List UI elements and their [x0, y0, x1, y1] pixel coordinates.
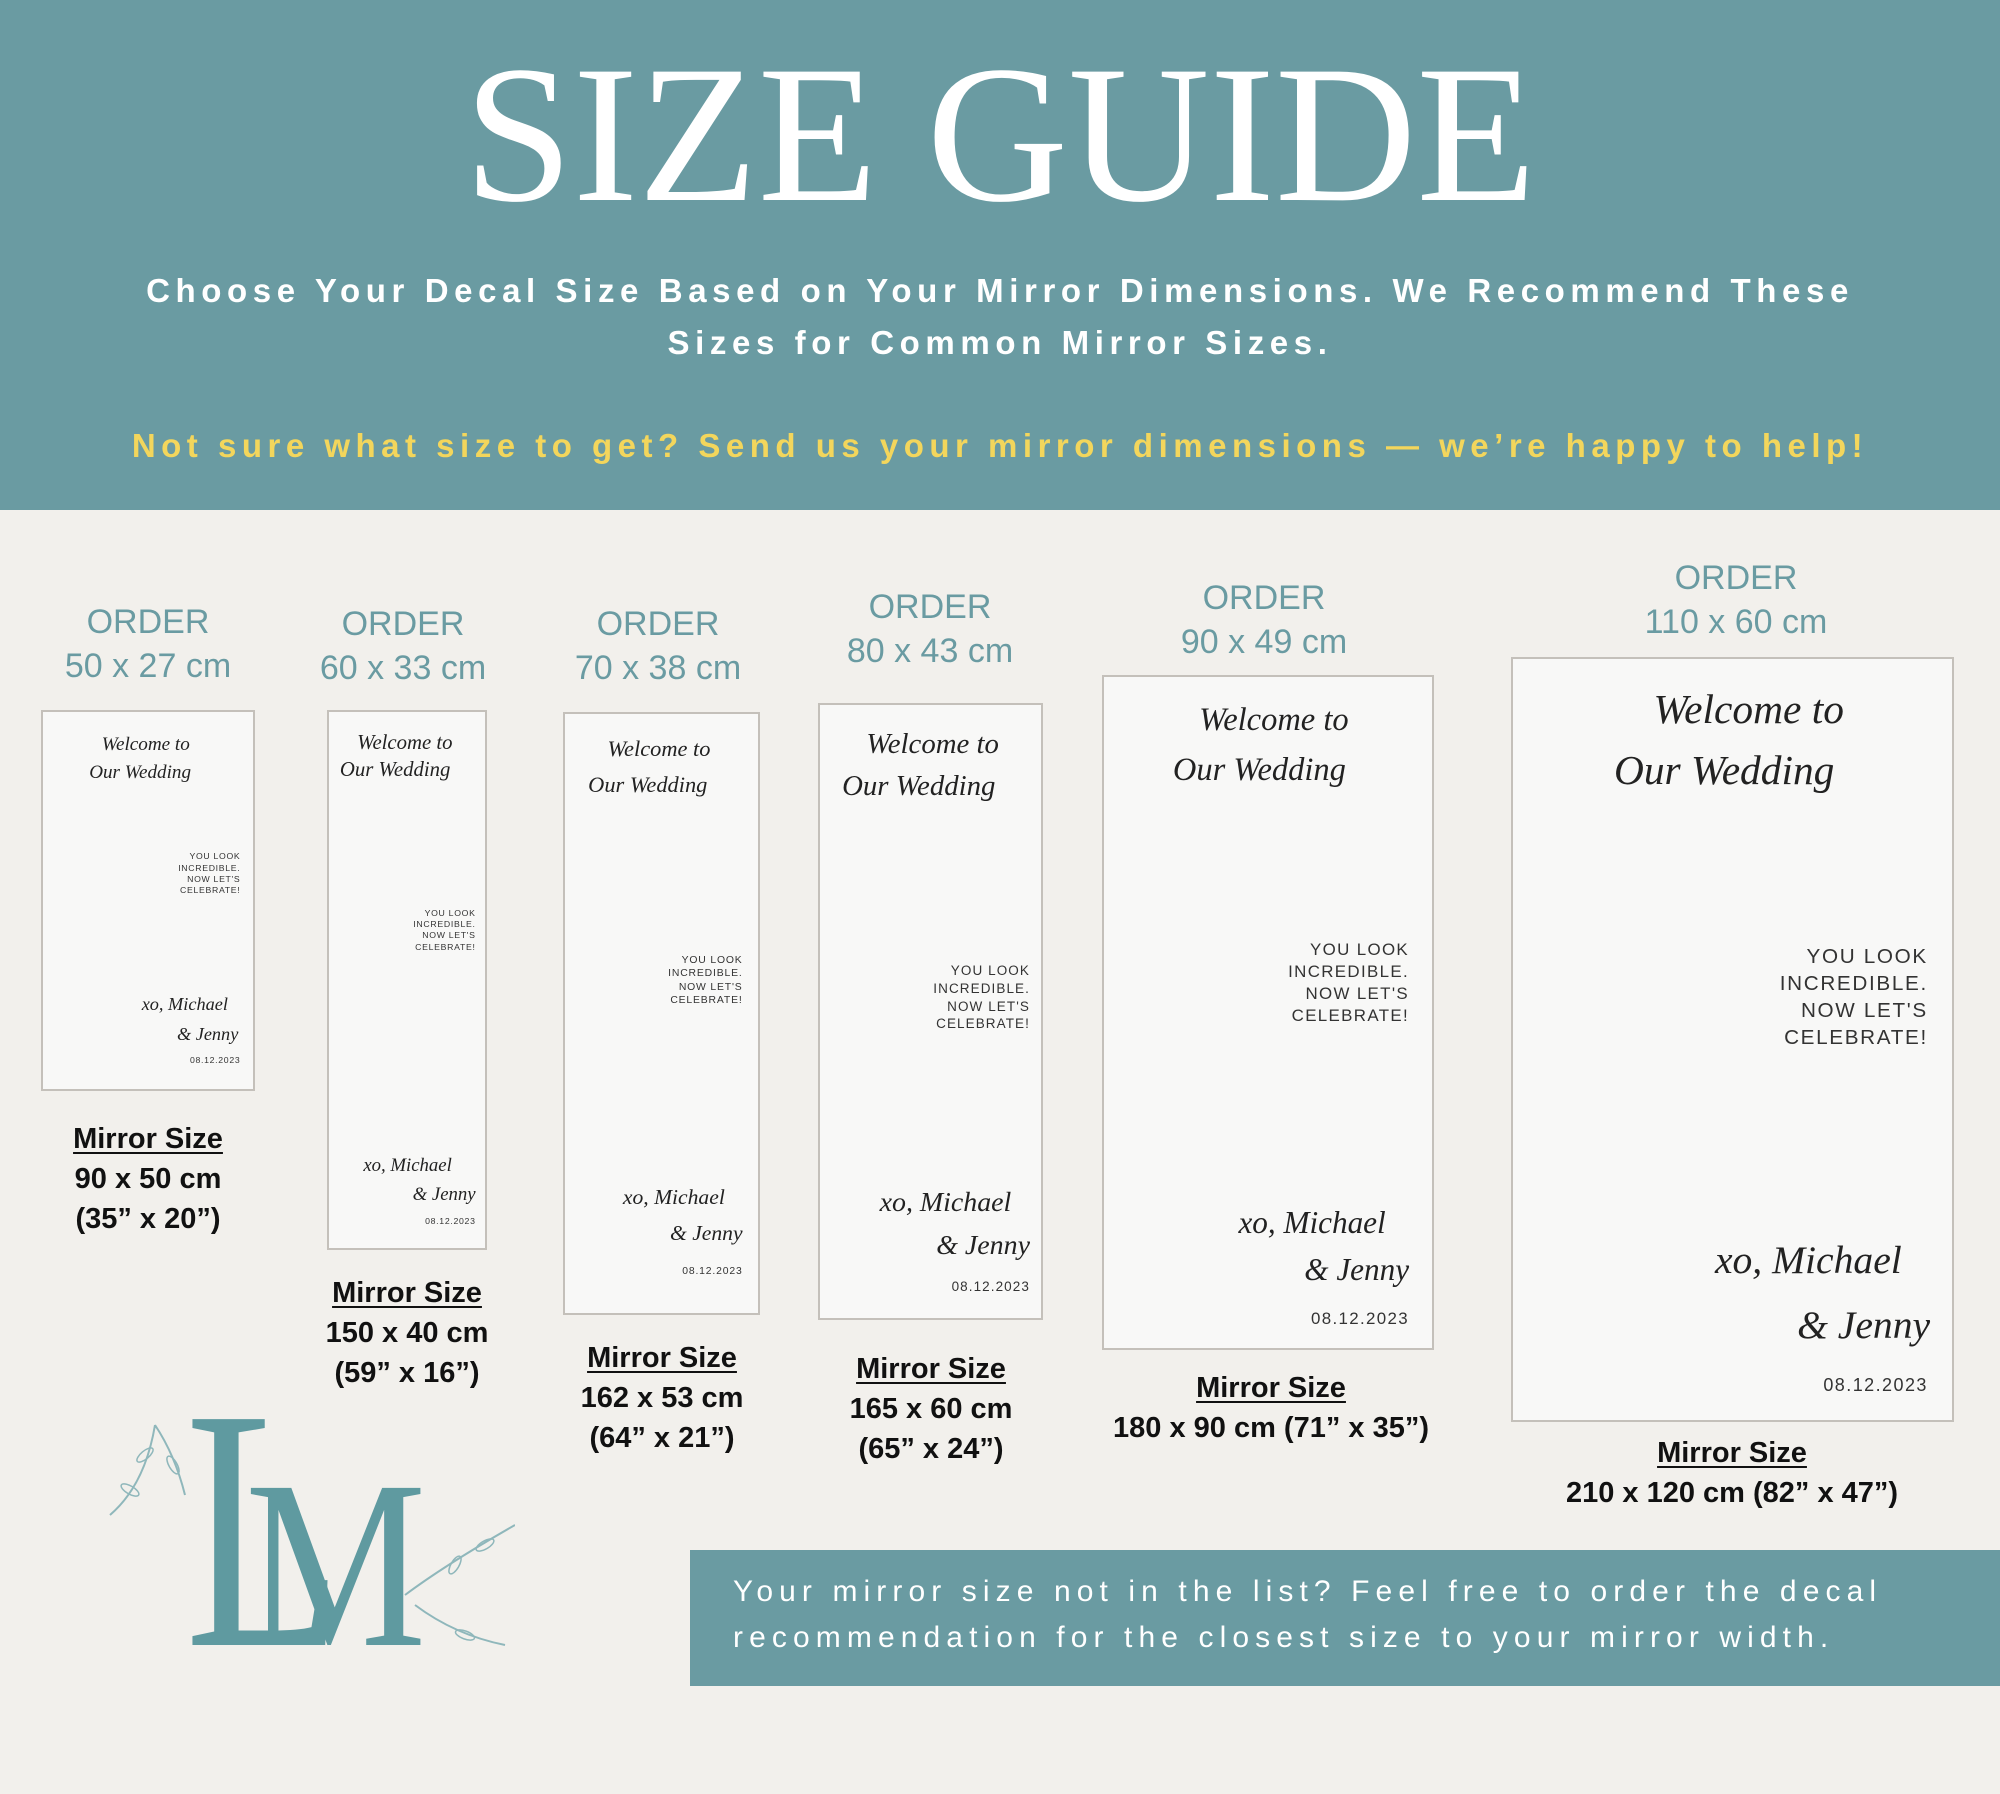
panel 2: xo, Michael [363, 1155, 452, 1176]
order label 4: ORDER [869, 588, 991, 626]
panel 3: xo, Michael [623, 1185, 725, 1209]
panel 1: & Jenny [177, 1024, 238, 1044]
subtitle: Sizes for Common Mirror Sizes. [668, 324, 1332, 361]
panel 4: Our Wedding [842, 770, 995, 802]
panel 6: NOW LET'S [1801, 999, 1928, 1022]
panel 6: INCREDIBLE. [1780, 972, 1928, 995]
panel 1: Our Wedding [89, 762, 191, 783]
order label 3: ORDER [597, 605, 719, 643]
mirror size 3: Mirror Size [587, 1342, 737, 1374]
title: SIZE GUIDE [464, 26, 1536, 243]
panel 1: INCREDIBLE. [178, 863, 240, 873]
panel 6: & Jenny [1797, 1303, 1930, 1347]
mirror size 3: 162 x 53 cm [581, 1382, 743, 1414]
panel 2: NOW LET'S [422, 930, 476, 940]
panel 2: INCREDIBLE. [413, 919, 476, 929]
subtitle [146, 272, 1854, 361]
panel 5: NOW LET'S [1305, 984, 1409, 1003]
mirror size 6 [1566, 1437, 1898, 1509]
mirror size 4 [850, 1353, 1012, 1465]
panel 5: Welcome to [1199, 702, 1349, 738]
panel 5: Our Wedding [1173, 752, 1346, 788]
mirror size 6: Mirror Size [1657, 1437, 1807, 1469]
order label 4 [847, 588, 1013, 670]
panel 2: 08.12.2023 [425, 1216, 476, 1226]
panel 4: INCREDIBLE. [933, 981, 1030, 996]
bottom note box [690, 1550, 2000, 1686]
mirror size 5 [1113, 1372, 1429, 1444]
bottom note box: recommendation for the closest size to your mirror width. [733, 1621, 1834, 1654]
panel 5: xo, Michael [1238, 1205, 1386, 1240]
order label 4: 80 x 43 cm [847, 632, 1013, 670]
panel 1: xo, Michael [142, 994, 228, 1014]
panel 4: 08.12.2023 [952, 1279, 1030, 1294]
panel 4 [818, 703, 1043, 1320]
mirror size 1: (35” x 20”) [75, 1203, 221, 1235]
panel 6: CELEBRATE! [1784, 1026, 1928, 1049]
panel 3: 08.12.2023 [682, 1266, 743, 1277]
panel 3: NOW LET'S [679, 982, 743, 993]
mirror size 2: (59” x 16”) [334, 1357, 480, 1389]
mirror size 4: Mirror Size [856, 1353, 1006, 1385]
mirror size 6: 210 x 120 cm (82” x 47”) [1566, 1477, 1898, 1509]
panel 6: 08.12.2023 [1823, 1375, 1928, 1395]
panel 3: Our Wedding [588, 772, 707, 797]
panel 2 [327, 710, 487, 1250]
panel 2: CELEBRATE! [415, 942, 476, 952]
mirror size 5: Mirror Size [1196, 1372, 1346, 1404]
order label 1: 50 x 27 cm [65, 647, 231, 685]
mirror size 3 [581, 1342, 743, 1454]
panel 6: Our Wedding [1614, 747, 1834, 793]
panel 6 [1511, 657, 1954, 1422]
panel 5: & Jenny [1304, 1252, 1409, 1287]
panel 1: YOU LOOK [189, 851, 240, 861]
panel 1: CELEBRATE! [180, 885, 240, 895]
panel 4: Welcome to [866, 728, 999, 760]
order label 5 [1181, 579, 1347, 661]
panel 4: & Jenny [936, 1230, 1030, 1261]
panel 3: CELEBRATE! [670, 995, 743, 1006]
panel 1: Welcome to [102, 734, 190, 755]
mirror size 4: (65” x 24”) [858, 1433, 1004, 1465]
panel 1: NOW LET'S [187, 874, 240, 884]
mirror size 2 [326, 1277, 488, 1389]
panel 3: YOU LOOK [682, 955, 743, 966]
mirror size 3: (64” x 21”) [589, 1422, 735, 1454]
order label 2: ORDER [342, 605, 464, 643]
order label 6: ORDER [1675, 559, 1797, 597]
panel 2: YOU LOOK [425, 908, 476, 918]
header band [0, 0, 2000, 510]
panel 3: Welcome to [607, 736, 710, 761]
mirror size 1: 90 x 50 cm [75, 1163, 221, 1195]
panel 5: CELEBRATE! [1292, 1006, 1409, 1025]
order label 3: 70 x 38 cm [575, 649, 741, 687]
order label 2 [320, 605, 486, 687]
panel 6: xo, Michael [1715, 1238, 1902, 1282]
panel 2: Our Wedding [340, 759, 450, 781]
order label 5: ORDER [1203, 579, 1325, 617]
order label 6: 110 x 60 cm [1645, 603, 1827, 641]
panel 2: & Jenny [413, 1184, 476, 1205]
panel 5: 08.12.2023 [1311, 1309, 1409, 1328]
panel 3: & Jenny [670, 1221, 743, 1245]
mirror size 5: 180 x 90 cm (71” x 35”) [1113, 1412, 1429, 1444]
order label 1 [65, 603, 231, 685]
bottom note box: Your mirror size not in the list? Feel free to order the decal [733, 1575, 1882, 1608]
order label 5: 90 x 49 cm [1181, 623, 1347, 661]
panel 1: 08.12.2023 [190, 1055, 240, 1065]
panel 4: NOW LET'S [947, 999, 1030, 1014]
mirror size 1 [73, 1123, 223, 1235]
panel 3 [563, 712, 760, 1315]
order label 3 [575, 605, 741, 687]
mirror size 1: Mirror Size [73, 1123, 223, 1155]
mirror size 2: 150 x 40 cm [326, 1317, 488, 1349]
panel 5: YOU LOOK [1310, 940, 1409, 959]
help note: Not sure what size to get? Send us your mirror dimensions — we’re happy to help! [132, 427, 1868, 464]
panel 2: Welcome to [357, 732, 453, 754]
panel 4: xo, Michael [880, 1187, 1011, 1218]
panel 5: INCREDIBLE. [1288, 962, 1409, 981]
order label 6 [1645, 559, 1827, 641]
panel 5 [1102, 675, 1434, 1350]
subtitle: Choose Your Decal Size Based on Your Mirror Dimensions. We Recommend These [146, 272, 1854, 309]
panel 6: YOU LOOK [1807, 945, 1928, 968]
panel 4: CELEBRATE! [936, 1016, 1030, 1031]
mirror size 4: 165 x 60 cm [850, 1393, 1012, 1425]
mirror size 2: Mirror Size [332, 1277, 482, 1309]
panel 3: INCREDIBLE. [668, 968, 743, 979]
logo [109, 1395, 515, 1685]
panel 4: YOU LOOK [951, 963, 1030, 978]
panel 6: Welcome to [1653, 686, 1844, 732]
panel 1 [41, 710, 255, 1091]
order label 2: 60 x 33 cm [320, 649, 486, 687]
order label 1: ORDER [87, 603, 209, 641]
